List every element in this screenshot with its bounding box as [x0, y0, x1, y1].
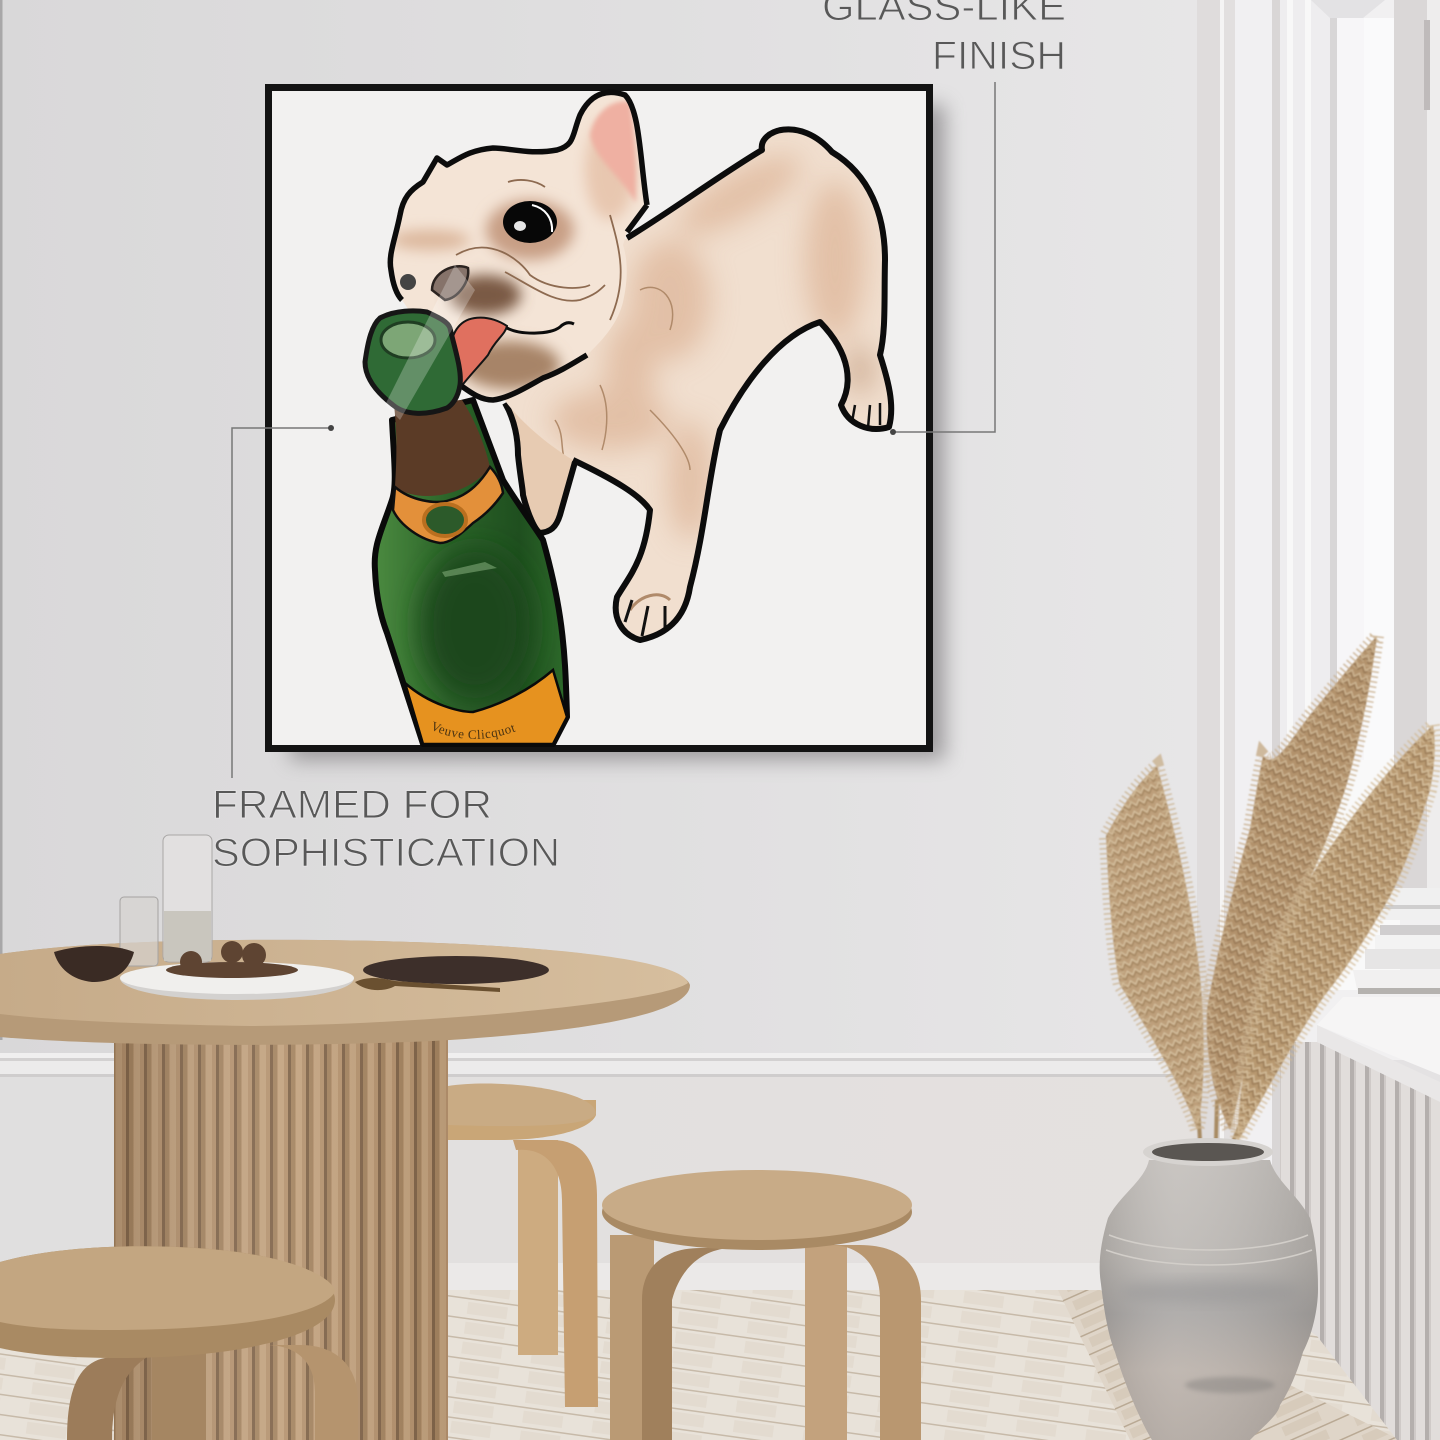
callout: glass-like finish: [822, 0, 1066, 435]
callout text: FRAMED FOR: [212, 783, 492, 827]
bottle label: [405, 670, 567, 744]
bottle shading: [420, 550, 530, 700]
dog mouth: [507, 323, 574, 333]
dog body shading: [550, 141, 874, 610]
front left stool: [0, 1246, 358, 1440]
dog far eye: [400, 274, 416, 290]
nuts: [166, 941, 298, 978]
dog head fill: [390, 92, 647, 400]
wall: [0, 0, 1440, 1060]
dog eye highlights: [514, 205, 552, 232]
dog body fill: [470, 129, 891, 640]
floor right section: [1058, 1290, 1400, 1440]
dog toes rear: [852, 403, 880, 428]
dog illustration: [390, 92, 891, 640]
pampas plume right: [1237, 725, 1435, 1143]
dado rail: [0, 1053, 1180, 1077]
jug: [163, 835, 212, 962]
radiator: [1280, 1042, 1440, 1440]
bottle neck foil: [394, 400, 490, 496]
bottle mouth: [381, 322, 435, 358]
pampas plume left: [1106, 766, 1204, 1130]
dark plate: [363, 956, 549, 984]
dog toes front: [625, 600, 665, 636]
framed artwork: [265, 84, 933, 752]
callout: glass-like finish: FINISH: [932, 34, 1066, 78]
lower wall panel: [0, 1060, 1280, 1295]
table top: [0, 940, 690, 1045]
dog muzzle wrinkles: [456, 180, 621, 320]
left edge strip: [0, 0, 2, 1040]
table pedestal: [114, 1030, 448, 1440]
bottle lip: [365, 311, 460, 413]
skirting board: [0, 1263, 1110, 1290]
bottle collar: [393, 467, 503, 543]
dog head outline: [390, 92, 647, 400]
books on sill: [1353, 925, 1440, 994]
marble plate: [120, 962, 354, 1000]
dog ear inner: [590, 101, 636, 203]
pampas plume centre: [1207, 636, 1377, 1130]
callout: framed for sophistication: SOPHISTICATION: [212, 831, 560, 875]
bottle body: [375, 400, 567, 744]
spoon: [355, 978, 500, 992]
bottle seal: [424, 504, 466, 536]
dog body outline: [573, 129, 891, 640]
dog face shading: [390, 101, 636, 389]
callout: framed for sophistication: [212, 425, 560, 875]
dog rear leg: [505, 400, 575, 533]
window: [1197, 0, 1440, 1300]
champagne bottle: [362, 308, 570, 747]
table pedestal shading: [114, 1030, 448, 1440]
floor: [0, 1290, 1440, 1440]
pampas stems: [1197, 1090, 1250, 1142]
dog tongue: [450, 318, 507, 388]
back stool: [448, 1084, 598, 1407]
bowl: [54, 946, 134, 982]
pampas grass: [1106, 636, 1435, 1143]
front right stool: [602, 1170, 921, 1440]
dog eye: [503, 201, 557, 243]
frame shadow: [290, 105, 945, 760]
bottle label text: Veuve Clicquot: [433, 721, 516, 740]
glass: [120, 897, 158, 966]
window sill: [1317, 997, 1440, 1102]
vase: [1100, 1138, 1318, 1440]
glass reflection: [385, 265, 475, 420]
dog nose: [432, 266, 468, 300]
